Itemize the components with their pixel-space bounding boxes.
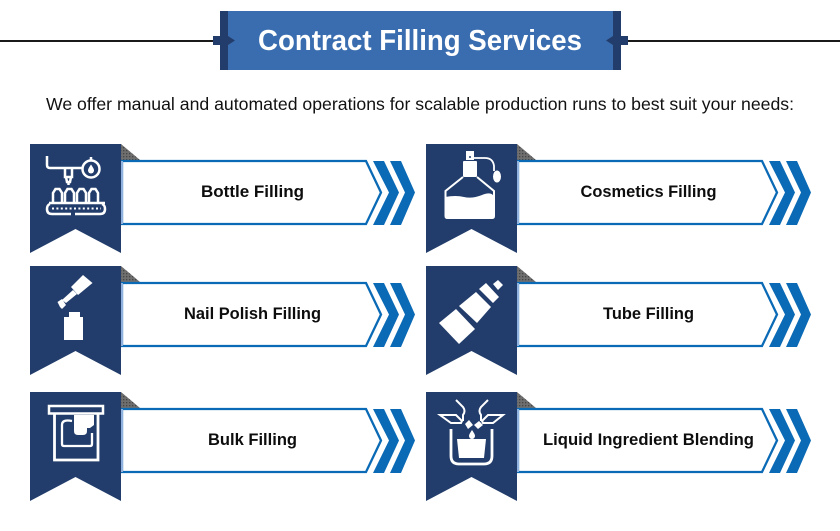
panel: cosmetics filling xyxy=(426,144,811,253)
label: bottle filling: Bottle Filling xyxy=(201,182,304,201)
label: liquid ingredient blending: Liquid Ingredient Blending xyxy=(543,430,754,449)
icon: bulk container xyxy=(49,406,103,460)
title banner: Contract Filling Services xyxy=(258,25,582,57)
icon: nail polish brush and bottle xyxy=(58,275,92,340)
icon: tube xyxy=(439,280,503,344)
icon: blending vessels and beaker xyxy=(440,400,503,464)
panel: tube filling xyxy=(426,266,811,375)
title banner xyxy=(0,11,840,70)
label: tube filling: Tube Filling xyxy=(603,304,694,323)
panel: nail polish filling xyxy=(30,266,415,375)
icon: perfume bottle xyxy=(445,151,501,218)
icon: bottle filling line xyxy=(47,156,105,214)
panel: bottle filling xyxy=(30,144,415,253)
panel: bulk filling xyxy=(30,392,415,501)
label: nail polish filling: Nail Polish Filling xyxy=(184,304,321,323)
label: cosmetics filling: Cosmetics Filling xyxy=(580,182,716,201)
label: bulk filling: Bulk Filling xyxy=(208,430,297,449)
panel: liquid ingredient blending xyxy=(426,392,811,501)
intro text: We offer manual and automated operations for scalable production runs to best suit your needs: xyxy=(46,94,794,114)
